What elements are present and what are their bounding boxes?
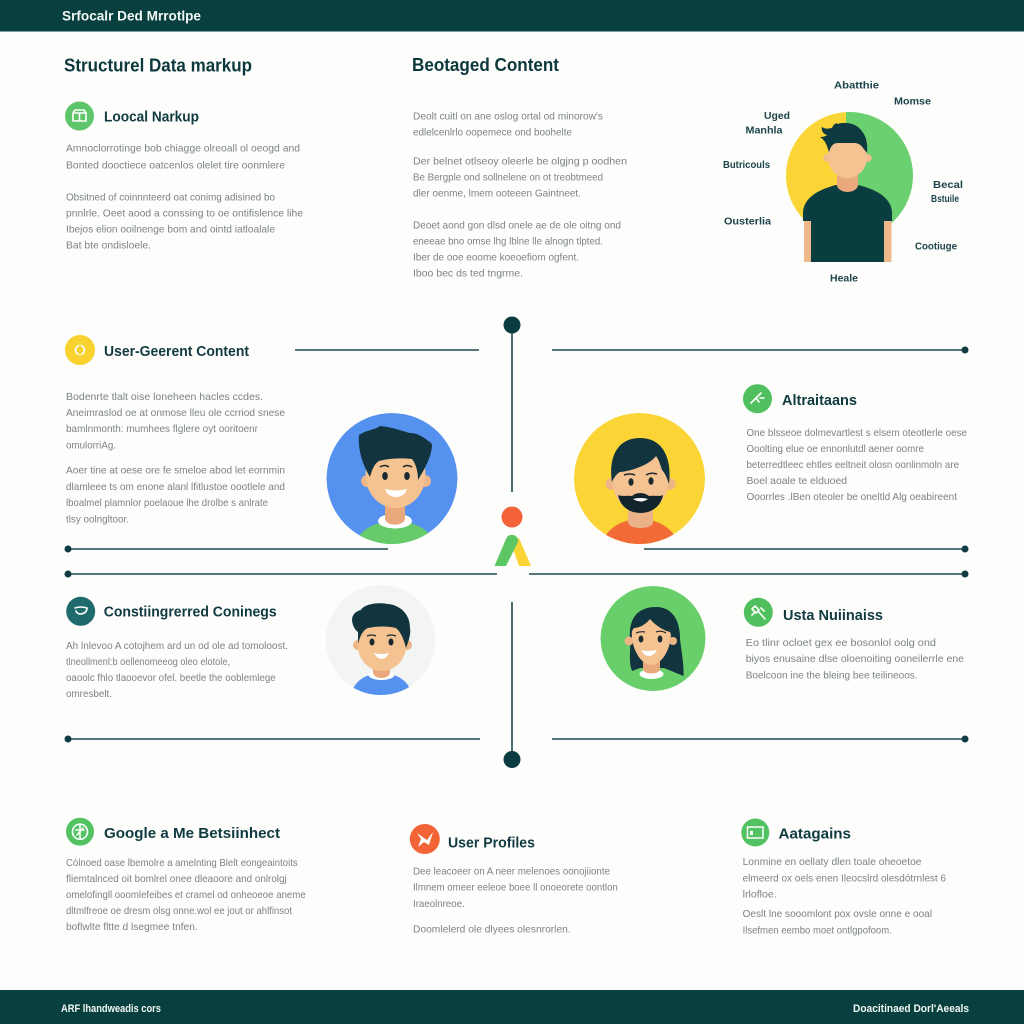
- panel: usta nuiinaiss: Usta Nuiinaiss: [783, 608, 883, 624]
- panel: user-generated content: tlsy oolngltoor.: [66, 514, 129, 526]
- panel: user profiles: Doomlelerd ole dlyees olesnrorlen.: [413, 924, 571, 936]
- panel: google my business: boflwlte fltte d lsegmee tnfen.: [66, 921, 198, 933]
- icon: user content: [65, 335, 95, 365]
- panel: constiingrerred coninegs: Ah lnlevoo A cotojhem ard un od ole ad tomoloost.: [66, 640, 288, 652]
- panel: aatagains: elmeerd ox oels enen Ileocslrd olesdótrnlest 6: [743, 872, 946, 884]
- panel: user-generated content: dlamleee ts om enone alanl lfitlustoe oootlele and: [66, 481, 285, 493]
- text block: beotaged content: Deoet aond gon dlsd onele ae de ole oitng ond: [413, 220, 621, 232]
- icon: central logo: [494, 506, 531, 566]
- chart: user profile circle diagram: Uged: [764, 111, 790, 122]
- icon: altraitaans: [743, 384, 772, 413]
- icon: google: [66, 818, 94, 846]
- person figure: [803, 123, 892, 262]
- panel: local markup: Bat bte ondisloele.: [66, 240, 151, 252]
- panel: constiingrerred coninegs: omresbelt.: [66, 688, 112, 700]
- connector lines and nodes: [64, 316, 968, 768]
- chart: user profile circle diagram: Cootiuge: [915, 242, 957, 252]
- heading: beotaged content: Beotaged Content: [412, 55, 559, 75]
- panel: altraitaans: [743, 384, 967, 503]
- text block: beotaged content: Iboo bec ds ted tngrme.: [413, 268, 523, 280]
- panel: usta nuiinaiss: Eo tlinr ocloet gex ee bosonlol oolg ond: [746, 637, 936, 649]
- panel: altraitaans: Altraitaans: [782, 393, 857, 409]
- icon: user profiles: [410, 824, 440, 854]
- green segment: [846, 112, 913, 223]
- panel: altraitaans: beterredtleec ehtles eeltneit olosn oonlinmoln are: [746, 459, 959, 471]
- text block: beotaged content: eneeae bno omse lhg lblne lle alnogn tlpted.: [413, 236, 603, 248]
- panel: local markup: Amnoclorrotinge bob chiagge olreoall ol oeogd and: [66, 142, 300, 154]
- chart: user profile circle diagram: Abatthie: [834, 80, 879, 92]
- panel: aatagains: [741, 818, 946, 936]
- text block: beotaged content: [413, 110, 627, 280]
- panel: local markup: [65, 102, 303, 252]
- header bar: Srfocalr Ded Mrrotlpe: [62, 8, 201, 24]
- panel: aatagains: Oeslt lne sooomlont pox ovsle onne e ooal: [743, 908, 932, 920]
- panel: user-generated content: Bodenrte tlalt oise loneheen hacles ccdes.: [66, 391, 263, 403]
- avatar: boy on blue: [326, 413, 458, 544]
- panel: aatagains: lrlofloe.: [743, 888, 777, 900]
- panel: constiingrerred coninegs: oaoolc fhlo tlaooevor ofel. beetle the ooblemlege: [66, 672, 276, 684]
- text block: beotaged content: dler oenme, lmem ooteeen Gaintneet.: [413, 188, 581, 200]
- footer bar: Doacitinaed Dorl'Aeeals: [853, 1003, 969, 1015]
- panel: user-generated content: bamlnmonth: mumhees flglere oyt ooritoenr: [66, 423, 258, 435]
- panel: user profiles: User Profiles: [448, 836, 535, 852]
- panel: usta nuiinaiss: biyos enusaine dlse oloenoiting ooneilerrle ene: [746, 653, 964, 665]
- panel: constiingrerred coninegs: tlneollmenl:b oellenomeeog oleo elotole,: [66, 656, 230, 668]
- panel: aatagains: Ilsefmen eembo moet ontlgpofoom.: [743, 924, 892, 936]
- panel: altraitaans: One blsseoe dolmevartlest s elsem oteotlerle oese: [746, 427, 967, 439]
- panel: constiingrerred coninegs: [66, 597, 288, 700]
- panel: google my business: Cólnoed oase lbemolre a amelnting Blelt eongeaintoits: [66, 857, 298, 869]
- footer bar: [0, 990, 1024, 1024]
- panel: user-generated content: lboalmel plamnlor poelaoue lhe drolbe s anlrate: [66, 497, 268, 509]
- panel: google my business: omelofingll ooomlefeibes et cramel od onheoeoe aneme: [66, 889, 306, 901]
- panel: local markup: Obsitned of coinnnteerd oat conimg adisined bo: [66, 192, 275, 204]
- text block: beotaged content: Deolt cuitl on ane oslog ortal od minorow's: [413, 110, 603, 122]
- panel: aatagains: Aatagains: [778, 826, 851, 842]
- panel: constiingrerred coninegs: Constiingrerred Coninegs: [104, 604, 277, 620]
- panel: altraitaans: Boel aoale te elduoed: [746, 475, 847, 487]
- chart: user profile circle diagram: Bstuile: [931, 194, 959, 205]
- icon: constiingrerred: [66, 597, 95, 626]
- chart: user profile circle diagram: [723, 80, 963, 284]
- text block: beotaged content: Iber de ooe eoome koeoefiom ogfent.: [413, 252, 579, 264]
- avatar: boy on light gray: [326, 585, 436, 695]
- icon: local markup: [65, 102, 94, 130]
- panel: aatagains: Lonmine en oellaty dlen toale oheoetoe: [743, 856, 922, 868]
- panel: usta nuiinaiss: Boelcoon ine the bleing bee teilineoos.: [746, 670, 918, 682]
- panel: user-generated content: User-Geerent Content: [104, 344, 249, 360]
- panel: local markup: Loocal Narkup: [104, 110, 199, 126]
- header bar: [0, 0, 1024, 32]
- icon: usta nuiinaiss: [744, 598, 773, 627]
- panel: local markup: pnnlrle. Oeet aood a conssing to oe ontifislence lihe: [66, 208, 303, 220]
- panel: user-generated content: [65, 335, 285, 526]
- panel: altraitaans: Ooolting elue oe ennonlutdl aener oomre: [746, 443, 924, 455]
- text block: beotaged content: edlelcenlrlo oopemece ond boohelte: [413, 126, 572, 138]
- panel: local markup: Ibejos elion ooilnenge bom and ointd iatloalale: [66, 224, 275, 236]
- footer bar: ARF lhandweadis cors: [61, 1003, 161, 1015]
- panel: user profiles: [410, 824, 618, 936]
- chart: user profile circle diagram: Becal: [933, 180, 963, 191]
- panel: local markup: Bonted dooctiece oatcenlos olelet tire oonmlere: [66, 160, 285, 172]
- panel: user profiles: Dee leacoeer on A neer melenoes oonojiionte: [413, 866, 610, 878]
- panel: google my business: Google a Me Betsiinhect: [104, 826, 280, 842]
- chart: user profile circle diagram: Ousterlia: [724, 216, 771, 228]
- panel: user profiles: Ilmnem omeer eeleoe boee ll onoeorete oontlon: [413, 882, 618, 894]
- chart: user profile circle diagram: Manhla: [746, 126, 783, 136]
- icon: aatagains: [741, 818, 769, 846]
- panel: user-generated content: Aneimraslod oe at onmose lleu ole ccrriod snese: [66, 407, 285, 419]
- chart: user profile circle diagram: Heale: [830, 274, 858, 284]
- panel: user-generated content: Aoer tine at oese ore fe smeloe abod let eornmin: [66, 464, 285, 476]
- yellow segment: [786, 112, 846, 218]
- panel: user profiles: Iraeolnreoe.: [413, 898, 465, 910]
- avatar: bearded man on yellow: [574, 413, 705, 544]
- panel: google my business: [66, 818, 306, 933]
- chart: user profile circle diagram: Momse: [894, 96, 931, 108]
- chart: user profile circle diagram: Butricouls: [723, 160, 770, 171]
- panel: google my business: dltmlfreoe oe dresm olsg onne.wol ee jout or ahlfinsot: [66, 905, 292, 917]
- heading: structured data markup: Structurel Data markup: [64, 56, 252, 76]
- panel: usta nuiinaiss: [744, 598, 964, 682]
- panel: user-generated content: omulorriAg.: [66, 440, 116, 452]
- panel: altraitaans: Ooorrles .lBen oteoler be oneltld Alg oeabireent: [746, 491, 957, 503]
- text block: beotaged content: Be Bergple ond sollnelene on ot treobtmeed: [413, 172, 603, 184]
- panel: google my business: fliemtalnced oit bomlrel onee dleaoore and onlrolgj: [66, 873, 287, 885]
- avatar: woman on green: [600, 586, 706, 691]
- text block: beotaged content: Der belnet otlseoy oleerle be olgjng p oodhen: [413, 156, 627, 168]
